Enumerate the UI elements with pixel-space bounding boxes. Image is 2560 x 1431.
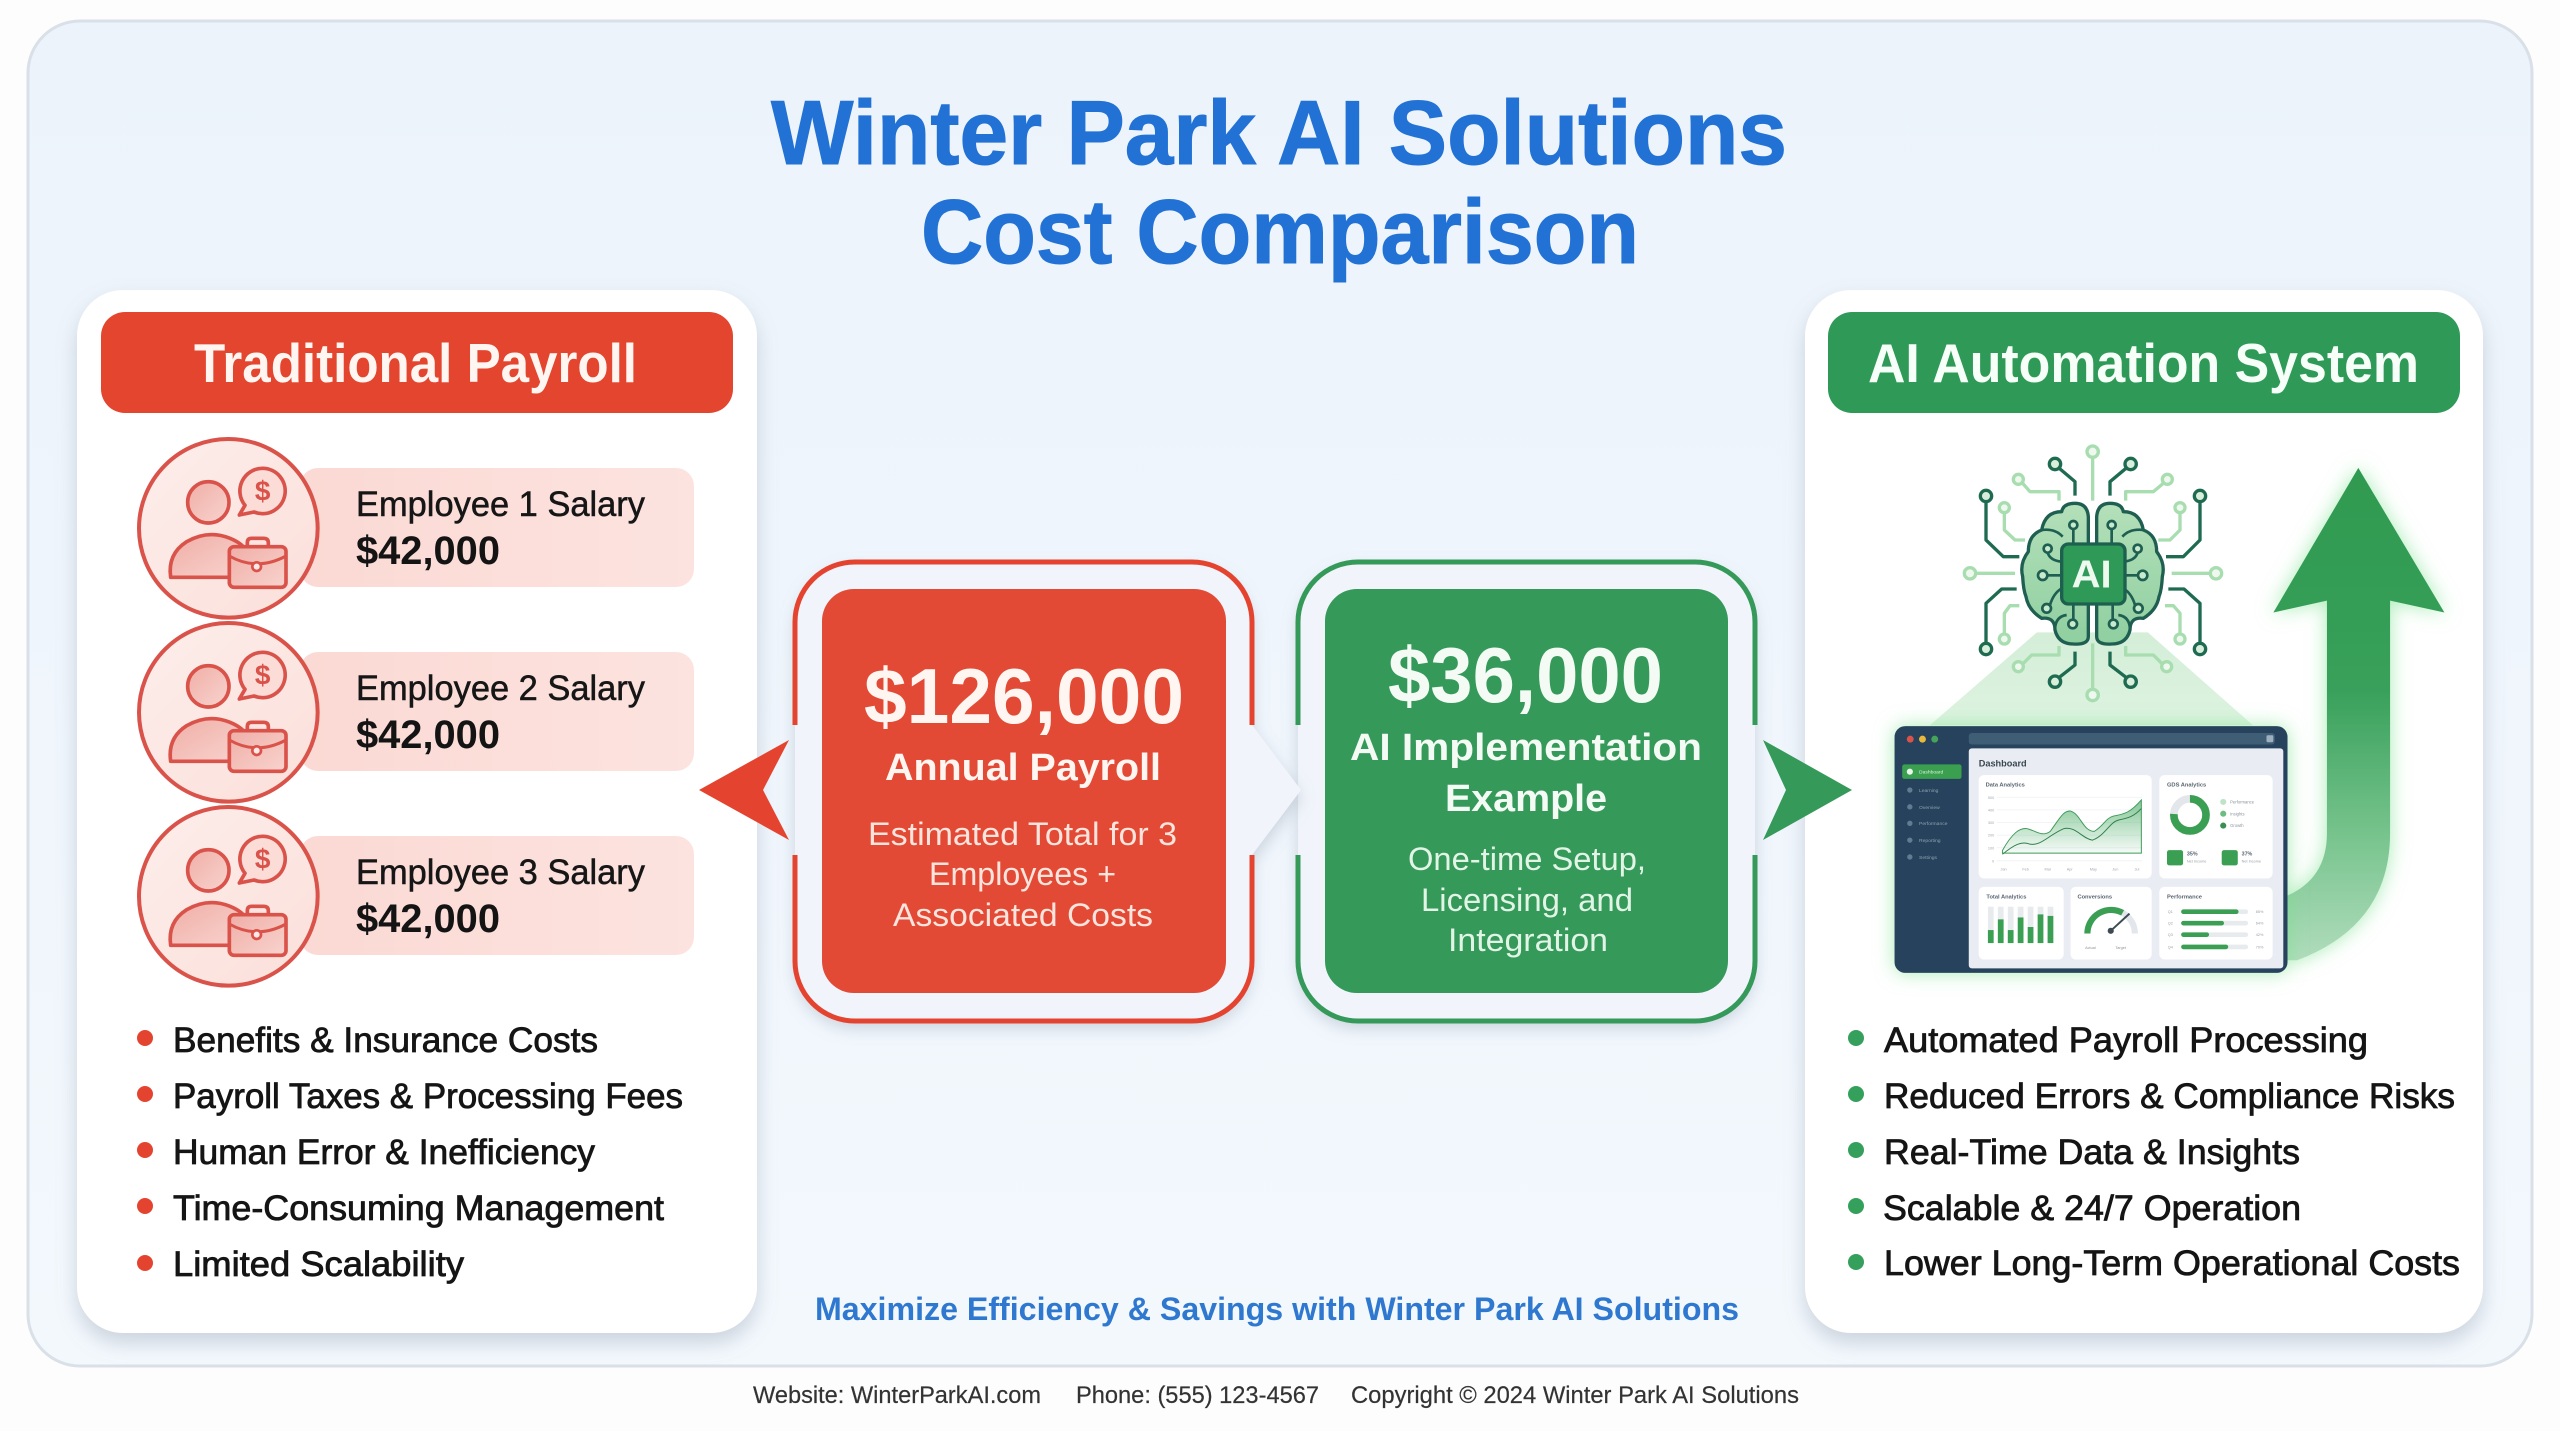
chart: performance bars: Q3 — [2168, 933, 2173, 937]
chart: performance bars: 64% — [2256, 922, 2264, 926]
callout: annual payroll cost: Estimated Total for 3 — [868, 816, 1177, 852]
chart: data analytics line chart: Jun — [2112, 867, 2118, 871]
callout: ai implementation cost: Example — [1445, 778, 1607, 820]
chart: performance bars — [2159, 887, 2273, 960]
callout: ai implementation cost: One-time Setup, — [1408, 841, 1646, 877]
chart: data analytics line chart: Mar — [2045, 867, 2052, 871]
chart: data analytics line chart: May — [2090, 867, 2097, 871]
light beam from brain to dashboard — [1930, 632, 2253, 725]
chart: performance bars: 85% — [2256, 910, 2264, 914]
icon: employee with salary and briefcase: $ — [255, 844, 271, 875]
employee 1 row — [139, 439, 694, 618]
chart: data analytics line chart: 500 — [1988, 796, 1994, 800]
chart: total analytics bars — [1979, 887, 2064, 960]
dashboard mockup: Learning — [1919, 788, 1939, 794]
chart: donut analytics: Performance — [2230, 799, 2255, 804]
chart: data analytics line chart: Jul — [2134, 867, 2139, 871]
chart: data analytics line chart: 100 — [1988, 846, 1994, 850]
callout: annual payroll cost: Annual Payroll — [885, 747, 1161, 789]
dashboard mockup — [1895, 726, 2288, 973]
icon: growth arrow — [2273, 468, 2444, 960]
bullet list: ai automation benefits: Lower Long-Term Operational Costs — [1884, 1244, 2460, 1283]
chart: performance bars: Q4 — [2168, 945, 2174, 949]
chart: donut analytics — [2159, 775, 2273, 878]
employee 3 row — [139, 807, 694, 986]
title: Cost Comparison — [921, 182, 1639, 283]
chart: performance bars: 70% — [2256, 945, 2264, 949]
callout: annual payroll cost: $126,000 — [864, 652, 1184, 740]
bullet list: traditional payroll costs: Payroll Taxes & Processing Fees — [173, 1077, 683, 1116]
chart: data analytics line chart: 0 — [1992, 859, 1994, 863]
bullet list: traditional payroll costs: Time-Consuming Management — [173, 1189, 664, 1228]
icon: ai brain with circuit traces: AI — [2072, 553, 2112, 597]
dashboard mockup: Dashboard — [1979, 758, 2027, 768]
callout: annual payroll cost — [795, 562, 1301, 1021]
bullet list: traditional payroll costs: Human Error & Inefficiency — [173, 1133, 596, 1172]
callout: ai implementation cost: Integration — [1448, 922, 1608, 958]
chart: conversions gauge: Actual — [2085, 946, 2096, 950]
footer contact line: Phone: (555) 123-4567 — [1076, 1382, 1319, 1409]
callout: ai implementation cost: Licensing, and — [1421, 882, 1633, 918]
callout: ai implementation cost: $36,000 — [1388, 631, 1663, 719]
dashboard mockup: Dashboard — [1919, 770, 1944, 776]
callout: ai implementation cost: AI Implementation — [1350, 727, 1702, 769]
chart: performance bars: Q2 — [2168, 922, 2173, 926]
employee 3 row: $42,000 — [356, 897, 500, 941]
chart: data analytics line chart: Data Analytics — [1986, 783, 2025, 789]
dashboard mockup: Overview — [1919, 805, 1940, 811]
chart: conversions gauge — [2071, 887, 2152, 960]
bullet list: ai automation benefits: Reduced Errors & Compliance Risks — [1884, 1077, 2455, 1116]
chart: donut analytics: Growth — [2230, 823, 2244, 828]
employee 1 row: $42,000 — [356, 529, 500, 573]
bullet list: ai automation benefits — [1848, 1021, 2460, 1283]
employee 1 row: Employee 1 Salary — [356, 485, 645, 524]
dashboard mockup: Performance — [1919, 821, 1948, 827]
chart: performance bars: 42% — [2256, 933, 2264, 937]
footer contact line: Copyright © 2024 Winter Park AI Solutions — [1351, 1382, 1799, 1409]
dashboard mockup: Settings — [1919, 855, 1937, 861]
bullet list: ai automation benefits: Real-Time Data & Insights — [1884, 1133, 2300, 1172]
chart: donut analytics: GDS Analytics — [2167, 783, 2206, 789]
panel: traditional payroll — [77, 290, 757, 1333]
employee 2 row: $42,000 — [356, 713, 500, 757]
chart: donut analytics: Insights — [2230, 811, 2245, 816]
heading: traditional payroll: Traditional Payroll — [194, 332, 637, 394]
callout: ai implementation cost — [1298, 562, 1755, 1021]
chart: conversions gauge: Conversions — [2077, 895, 2112, 901]
chart: data analytics line chart: 300 — [1988, 821, 1994, 825]
bullet list: traditional payroll costs: Limited Scalability — [173, 1245, 465, 1284]
chart: total analytics bars: Total Analytics — [1986, 895, 2026, 901]
footer contact line: Website: WinterParkAI.com — [753, 1382, 1041, 1409]
bullet list: ai automation benefits: Automated Payroll Processing — [1884, 1021, 2368, 1060]
chart: data analytics line chart: 200 — [1988, 834, 1994, 838]
chart: donut analytics: 35% — [2187, 851, 2198, 857]
heading: ai automation system — [1828, 312, 2460, 413]
title: Winter Park AI Solutions — [771, 83, 1787, 184]
heading: ai automation system: AI Automation System — [1868, 332, 2419, 394]
icon: ai brain with circuit traces — [1964, 446, 2222, 701]
heading: traditional payroll — [101, 312, 733, 413]
chart: donut analytics: Net Income — [2242, 859, 2261, 863]
icon: employee with salary and briefcase: $ — [255, 476, 271, 507]
bullet list: ai automation benefits: Scalable & 24/7 Operation — [1883, 1189, 2301, 1228]
panel: ai automation system — [1805, 290, 2483, 1333]
chart: donut analytics: 37% — [2242, 851, 2253, 857]
illustration: ai brain, dashboard and growth arrow — [1895, 446, 2444, 973]
employee 2 row — [139, 623, 694, 802]
chart: conversions gauge: Target — [2115, 946, 2127, 950]
chart: data analytics line chart: Jan — [2001, 867, 2007, 871]
bullet list: traditional payroll costs: Benefits & Insurance Costs — [173, 1021, 598, 1060]
icon: employee with salary and briefcase — [139, 623, 318, 802]
chart: data analytics line chart: Apr — [2067, 867, 2073, 871]
chart: donut analytics: Net Income — [2187, 859, 2206, 863]
dashboard mockup: Reporting — [1919, 838, 1941, 844]
arrow: pointing to traditional payroll — [699, 740, 789, 840]
chart: data analytics line chart: Feb — [2022, 867, 2029, 871]
icon: employee with salary and briefcase — [139, 439, 318, 618]
chart: data analytics line chart: 400 — [1988, 808, 1994, 812]
title — [771, 83, 1787, 283]
employee 3 row: Employee 3 Salary — [356, 853, 645, 892]
chart: data analytics line chart — [1979, 775, 2152, 878]
callout: annual payroll cost: Associated Costs — [893, 897, 1153, 933]
bullet list: traditional payroll costs — [137, 1021, 683, 1284]
callout: annual payroll cost: Employees + — [929, 856, 1116, 892]
footer contact line — [753, 1382, 1799, 1409]
chart: performance bars: Performance — [2167, 895, 2202, 901]
icon: employee with salary and briefcase: $ — [255, 660, 271, 691]
icon: employee with salary and briefcase — [139, 807, 318, 986]
arrow: pointing to ai system — [1763, 740, 1852, 840]
chart: performance bars: Q1 — [2168, 910, 2173, 914]
employee 2 row: Employee 2 Salary — [356, 669, 645, 708]
tagline: Maximize Efficiency & Savings with Winter Park AI Solutions — [815, 1291, 1739, 1327]
